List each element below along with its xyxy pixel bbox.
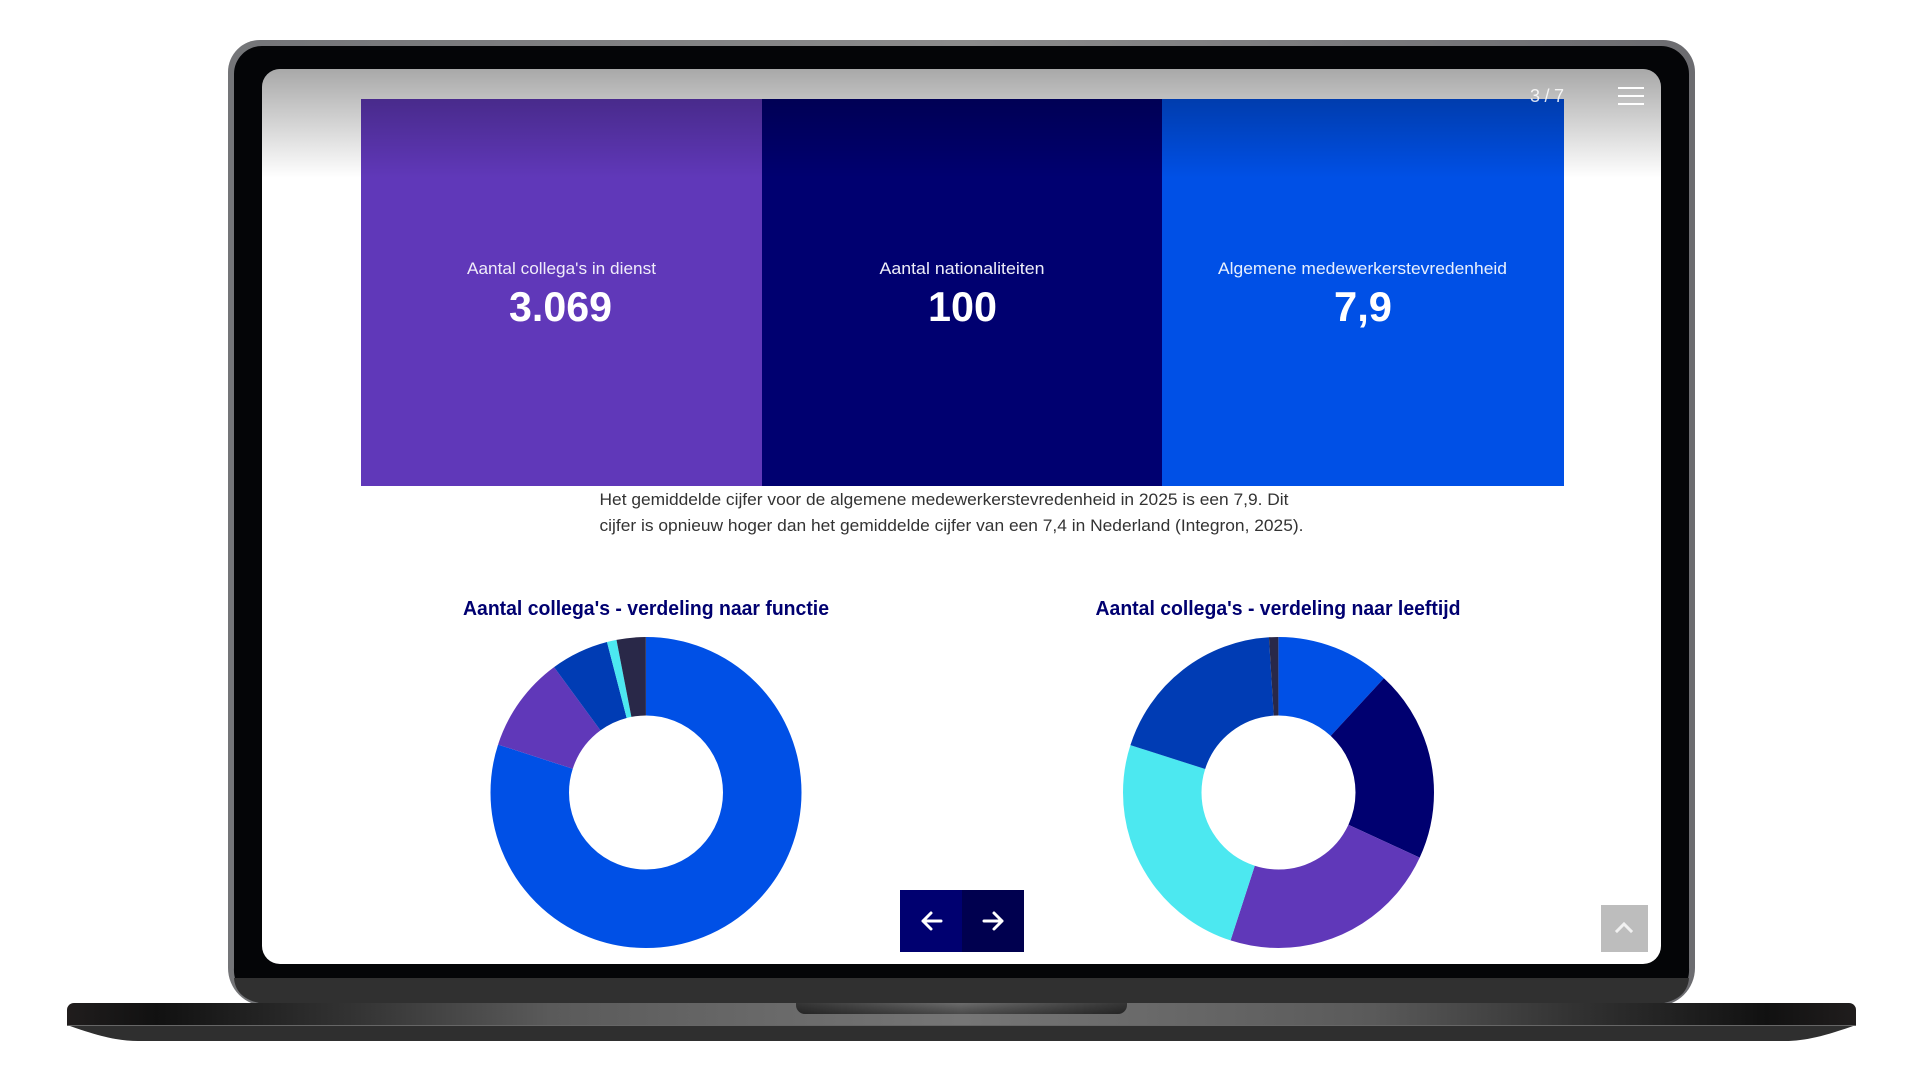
page counter: 3 / 7: [1530, 86, 1564, 106]
chart heading: verdeling naar functie: Aantal collega's - verdeling naar functie: [463, 598, 829, 620]
panel: aantal collega's in dienst: [361, 99, 762, 486]
body text: Het gemiddelde cijfer voor de algemene medewerkerstevredenheid in 2025 is een 7,9. Dit: [600, 490, 1289, 509]
screen: [262, 69, 1661, 964]
panel: algemene medewerkerstevredenheid: Algemene medewerkerstevredenheid: [1218, 259, 1507, 278]
laptop base: [67, 1003, 1856, 1041]
panel: algemene medewerkerstevredenheid: 7,9: [1334, 283, 1392, 330]
body text: [600, 490, 1304, 535]
panel: aantal collega's in dienst: Aantal collega's in dienst: [467, 259, 656, 278]
chart heading: verdeling naar leeftijd: Aantal collega's - verdeling naar leeftijd: [1096, 598, 1460, 620]
panel: aantal nationaliteiten: 100: [928, 283, 997, 330]
button: back to top: [1601, 905, 1648, 952]
top shade overlay: [262, 69, 1661, 178]
panel: aantal collega's in dienst: 3.069: [509, 283, 612, 330]
laptop frame: [228, 40, 1695, 1006]
button: next slide: [962, 890, 1024, 952]
donut chart: verdeling naar functie: [530, 676, 762, 909]
donut chart: verdeling naar leeftijd: [1162, 676, 1395, 909]
body text: cijfer is opnieuw hoger dan het gemiddelde cijfer van een 7,4 in Nederland (Integron, 2025).: [600, 516, 1304, 535]
panel: algemene medewerkerstevredenheid: [1162, 99, 1564, 486]
icon: hamburger menu: [1618, 87, 1644, 105]
panel: aantal nationaliteiten: Aantal nationaliteiten: [880, 259, 1044, 278]
panel: aantal nationaliteiten: [762, 99, 1162, 486]
button: previous slide: [900, 890, 962, 952]
